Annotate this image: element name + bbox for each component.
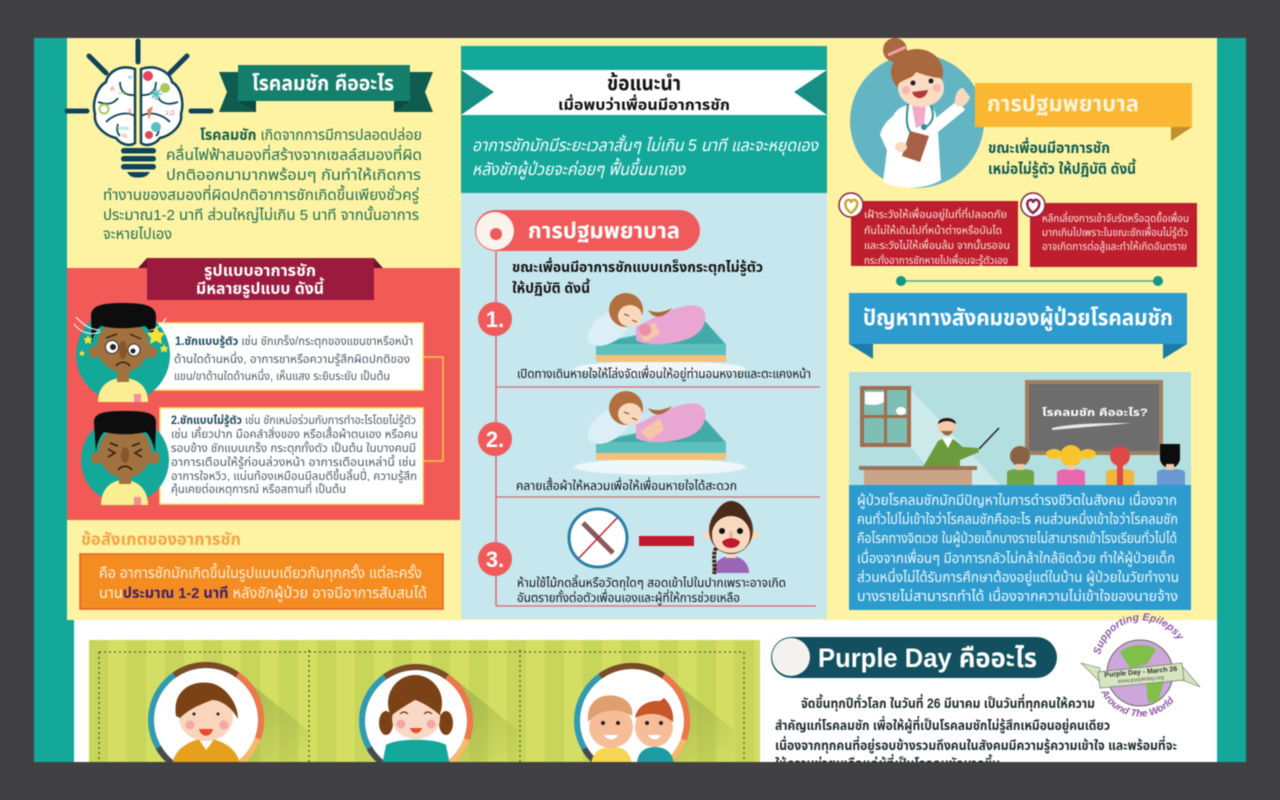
illustration: girl lying in bed 1 [574, 293, 746, 377]
text block: first aid intro: ขณะเพื่อนมีอาการชักแบบเกร็งกระตุกไม่รู้ตัว [512, 257, 763, 277]
step 3 instruction [517, 575, 786, 605]
icon: girl with open mouth [704, 501, 759, 574]
icon: heart badge 1 [839, 193, 863, 217]
text block: social problems: คนทั่วไปไม่เข้าใจว่าโรคลมชักคืออะไร คนส่วนหนึ่งเข้าใจว่าโรคลมชัก [857, 509, 1178, 527]
text block: about purple day: สำคัญแก่โรคลมชัก เพื่อให้ผู้ที่เป็นโรคลมชักไม่รู้สึกเหมือนอยู่คนเดียว [775, 716, 1110, 735]
text block: seizure is short: อาการชักมักมีระยะเวลาสั้นๆ ไม่เกิน 5 นาที และจะหยุดเอง [472, 134, 819, 156]
icon: brain light bulb: ♪♫ [165, 108, 175, 117]
heading ribbon: social problems: ปัญหาทางสังคมของผู้ป่วยโรคลมชัก [863, 305, 1173, 331]
panel: advice header [461, 46, 827, 193]
card: type 2 text [160, 408, 423, 504]
text block: definition: โรคลมชัก เกิดจากการมีการปลอดปล่อย [200, 126, 422, 144]
icon: brain light bulb: 3 [127, 108, 132, 117]
heading ribbon: first aid: การปฐมพยาบาล [987, 91, 1139, 116]
step 2 number [478, 422, 512, 456]
icon: brain light bulb: % [122, 134, 128, 140]
text block: definition [103, 126, 422, 243]
text block: while unconscious: เหม่อไม่รู้ตัว ให้ปฏิบัติ ดังนี้ [988, 158, 1137, 179]
banner: advice title [461, 70, 827, 115]
card: type 2 text: คุ้นเคยต่อเหตุการณ์ หรือสถานที่ เป็นต้น [171, 481, 346, 496]
icon: dizzy boy [74, 303, 170, 402]
icon: brain light bulb: Some [116, 126, 129, 132]
blackboard: โรคลมชัก คืออะไร? [1042, 407, 1148, 419]
step 1 number: 1. [486, 307, 504, 332]
text block: social problems: ผู้ป่วยโรคลมชักมักมีปัญหาในการดำรงชีวิตในสังคม เนื่องจาก [857, 490, 1177, 509]
text block: social problems: เนื่องจากเพื่อนๆ มีอาการกลัวไม่กล้าใกล้ชิดด้วย ทำให้ผู้ป่วยเด็ก [857, 548, 1175, 567]
pill heading: first aid [475, 210, 700, 251]
panel: seizure types [67, 258, 460, 520]
card: keep safe [839, 193, 1018, 267]
heading ribbon: what is epilepsy [219, 65, 433, 112]
icon: no stick in mouth [569, 509, 627, 567]
portrait: two children [573, 662, 734, 763]
text block: while unconscious: ขณะเพื่อนมีอาการชัก [988, 137, 1110, 157]
card: type 1 text [154, 323, 423, 390]
ribbon heading: seizure types: มีหลายรูปแบบ ดังนี้ [196, 277, 325, 299]
step 3 number: 3. [486, 547, 504, 572]
heading ribbon: first aid [975, 83, 1192, 141]
step 2 instruction: คลายเสื้อผ้าให้หลวมเพื่อให้เพื่อนหายใจได้สะดวก [516, 477, 737, 493]
ribbon heading: seizure types [138, 258, 383, 300]
text block: definition: จะหายไปเอง [103, 226, 172, 243]
card: type 1 text: ด้านใดด้านหนึ่ง, อาการชาหรือความรู้สึกผิดปกติของ [174, 351, 410, 366]
heading ribbon: what is epilepsy: โรคลมชัก คืออะไร [252, 73, 394, 95]
step 1 instruction: เปิดทางเดินหายใจให้โล่งจัดเพื่อนให้อยู่ท่านอนหงายและตะแคงหน้า [517, 365, 811, 381]
icon: brain light bulb [67, 41, 211, 178]
text block: first aid intro: ให้ปฏิบัติ ดังนี้ [512, 278, 591, 296]
card: avoid restraining: หลีกเลี่ยงการเข้าจับรัดหรือฉุดยื้อเพื่อน [1042, 211, 1189, 225]
icon: brain light bulb: w [127, 75, 133, 81]
panel: first aid steps [461, 193, 827, 619]
card: type 1 text: 1.ชักแบบรู้ตัว เช่น ชักเกร็ง/กระตุกของแขนขาหรือหน้า [175, 334, 413, 349]
text block: first aid intro [512, 257, 763, 296]
icon: heart badge 2 [1021, 193, 1045, 217]
logo: purple day: Around The World [1100, 690, 1174, 718]
text block: seizure is short: หลังชักผู้ป่วยจะค่อยๆ ฟื้นขึ้นมาเอง [472, 157, 686, 180]
text block: while unconscious [988, 137, 1137, 179]
pill heading: first aid: การปฐมพยาบาล [528, 218, 680, 243]
logo: purple day: Supporting Epilepsy [1093, 612, 1184, 655]
text block: seizure is short [472, 134, 819, 180]
logo: purple day [1080, 612, 1201, 718]
panel: striped green portraits [88, 639, 761, 763]
ribbon heading: seizure types: รูปแบบอาการชัก [204, 263, 316, 281]
text block: definition: ปกติออกมามากพร้อมๆ กันทำให้เกิดการ [166, 167, 421, 184]
card: type 2 text: 2.ชักแบบไม่รู้ตัว เช่น ชักเหม่อร่วมกับการทำอะไรโดยไม่รู้ตัว [171, 413, 416, 428]
connector bracket [423, 357, 443, 461]
illustration: girl lying in bed 2 [574, 391, 746, 475]
icon: brain light bulb: i+d [118, 91, 126, 97]
window [860, 386, 911, 447]
teacher [923, 417, 999, 467]
card: type 2 text: รอบข้าง ชักแบบเกร็ง กระตุกทั้งตัว เป็นต้น ในบางคนมี [171, 441, 416, 455]
text block: social problems: ส่วนหนึ่งไม่ได้รับการศึกษาต้องอยู่แต่ในบ้าน ผู้ป่วยในวัยทำงาน [857, 567, 1179, 586]
callout: seizure duration: นานประมาณ 1-2 นาที หลังชักผู้ป่วย อาจมีอาการสับสนได้ [99, 585, 427, 602]
banner: advice title: ข้อแนะนำ [607, 73, 681, 95]
heading: seizure observation: ข้อสังเกตของอาการชัก [81, 530, 241, 549]
card: avoid restraining: มากเกินไปเพราะในขณะชักเพื่อนไม่รู้ตัว [1042, 225, 1188, 239]
card: type 2 text: อาการใจหวิว, แน่นท้องเหมือนมีลมตีขึ้นลิ้นปี่, ความรู้สึก [171, 468, 417, 483]
step 3 instruction: ห้ามใช้ไม้กดลิ้นหรือวัตถุใดๆ สอดเข้าไปในปากเพราะอาจเกิด [517, 575, 786, 590]
banner: advice title: เมื่อพบว่าเพื่อนมีอาการชัก [558, 94, 730, 114]
icon: brain light bulb: A [110, 86, 115, 93]
text block: about purple day: เนื่องจากทุกคนที่อยู่รอบข้างรวมถึงคนในสังคมมีความรู้ความเข้าใจ และพร้อมที่จะ [775, 736, 1177, 755]
text block: social problems: คือโรคทางจิตเวช ในผู้ป่วยเด็กบางรายไม่สามารถเข้าโรงเรียนทั่วไปได้ [857, 529, 1177, 547]
step 1 number [478, 302, 512, 336]
card: keep safe: เฝ้าระวังให้เพื่อนอยู่ในที่ที่ปลอดภัย [864, 207, 1007, 221]
text block: definition: ทำงานของสมองที่ผิดปกติอาการชักเกิดขึ้นเพียงชั่วครู่ [103, 184, 419, 204]
step 3 number [478, 542, 512, 576]
card: avoid restraining: อาจเกิดการต่อสู้และทำให้เกิดอันตราย [1042, 240, 1187, 253]
panel: classroom illustration [849, 372, 1191, 610]
portrait: girl [358, 663, 516, 763]
text block: social problems [849, 485, 1191, 610]
heading ribbon: social problems [849, 293, 1187, 359]
card: type 1 text: แขน/ขาด้านใดด้านหนึ่ง, เห็นแสง ระยิบระยับ เป็นต้น [174, 368, 390, 383]
logo: purple day: www.purpleday.org [1117, 675, 1164, 685]
pill heading: purple day: Purple Day คืออะไร [818, 643, 1037, 673]
icon: boy with eyes shut [81, 411, 169, 505]
blackboard [1025, 380, 1163, 455]
card: avoid restraining [1021, 193, 1197, 267]
card: keep safe: และระวังไม่ให้เพื่อนล้ม จากนั้นรอจน [864, 238, 1010, 252]
minus bar [639, 536, 694, 546]
callout: seizure duration [80, 554, 443, 609]
step 2 number: 2. [486, 427, 504, 452]
step 3 instruction: อันตรายทั้งต่อตัวเพื่อนเองและผู้ที่ให้การช่วยเหลือ [517, 589, 740, 605]
text block: social problems: บางรายไม่สามารถทำได้ เนื่องจากความไม่เข้าใจของนายจ้าง [857, 586, 1178, 604]
pill heading: purple day [771, 637, 1057, 678]
text block: about purple day: จัดขึ้นทุกปีทั่วโลก ในวันที่ 26 มีนาคม เป็นวันที่ทุกคนให้ความ [801, 694, 1095, 712]
callout: seizure duration: คือ อาการชักมักเกิดขึ้นในรูปแบบเดียวกันทุกครั้ง แต่ละครั้ง [99, 562, 422, 582]
desk [859, 466, 977, 485]
students [1007, 444, 1185, 485]
text block: definition: ประมาณ1-2 นาที ส่วนใหญ่ไม่เกิน 5 นาที จากนั้นอาการ [103, 205, 419, 224]
logo: purple day: Purple Day - March 26 [1104, 666, 1178, 679]
card: type 2 text: เช่น เคี้ยวปาก มือคลำสิ่งของ หรือเสื้อผ้าตนเอง หรือคน [171, 426, 418, 441]
card: keep safe: กระทั่งอาการชักหายไปเพื่อนจะรู้ตัวเอง [864, 253, 1008, 267]
portrait: boy [147, 661, 308, 763]
card: keep safe: กันไม่ให้เดินไปที่หน้าต่างหรือบันได [864, 223, 1002, 237]
icon: doctor [850, 38, 984, 188]
text block: about purple day: ให้ความช่วยเหลือแก่ผู้ที่เป็นโรคลมชักมากขึ้น [775, 754, 1000, 773]
text block: about purple day [774, 693, 1178, 763]
card: type 2 text: อาการเตือนให้รู้ก่อนล่วงหน้า อาการเตือนเหล่านี้ เช่น [171, 454, 416, 469]
text block: definition: คลื่นไฟฟ้าสมองที่สร้างจากเซลล์สมองที่ผิด [166, 144, 422, 164]
